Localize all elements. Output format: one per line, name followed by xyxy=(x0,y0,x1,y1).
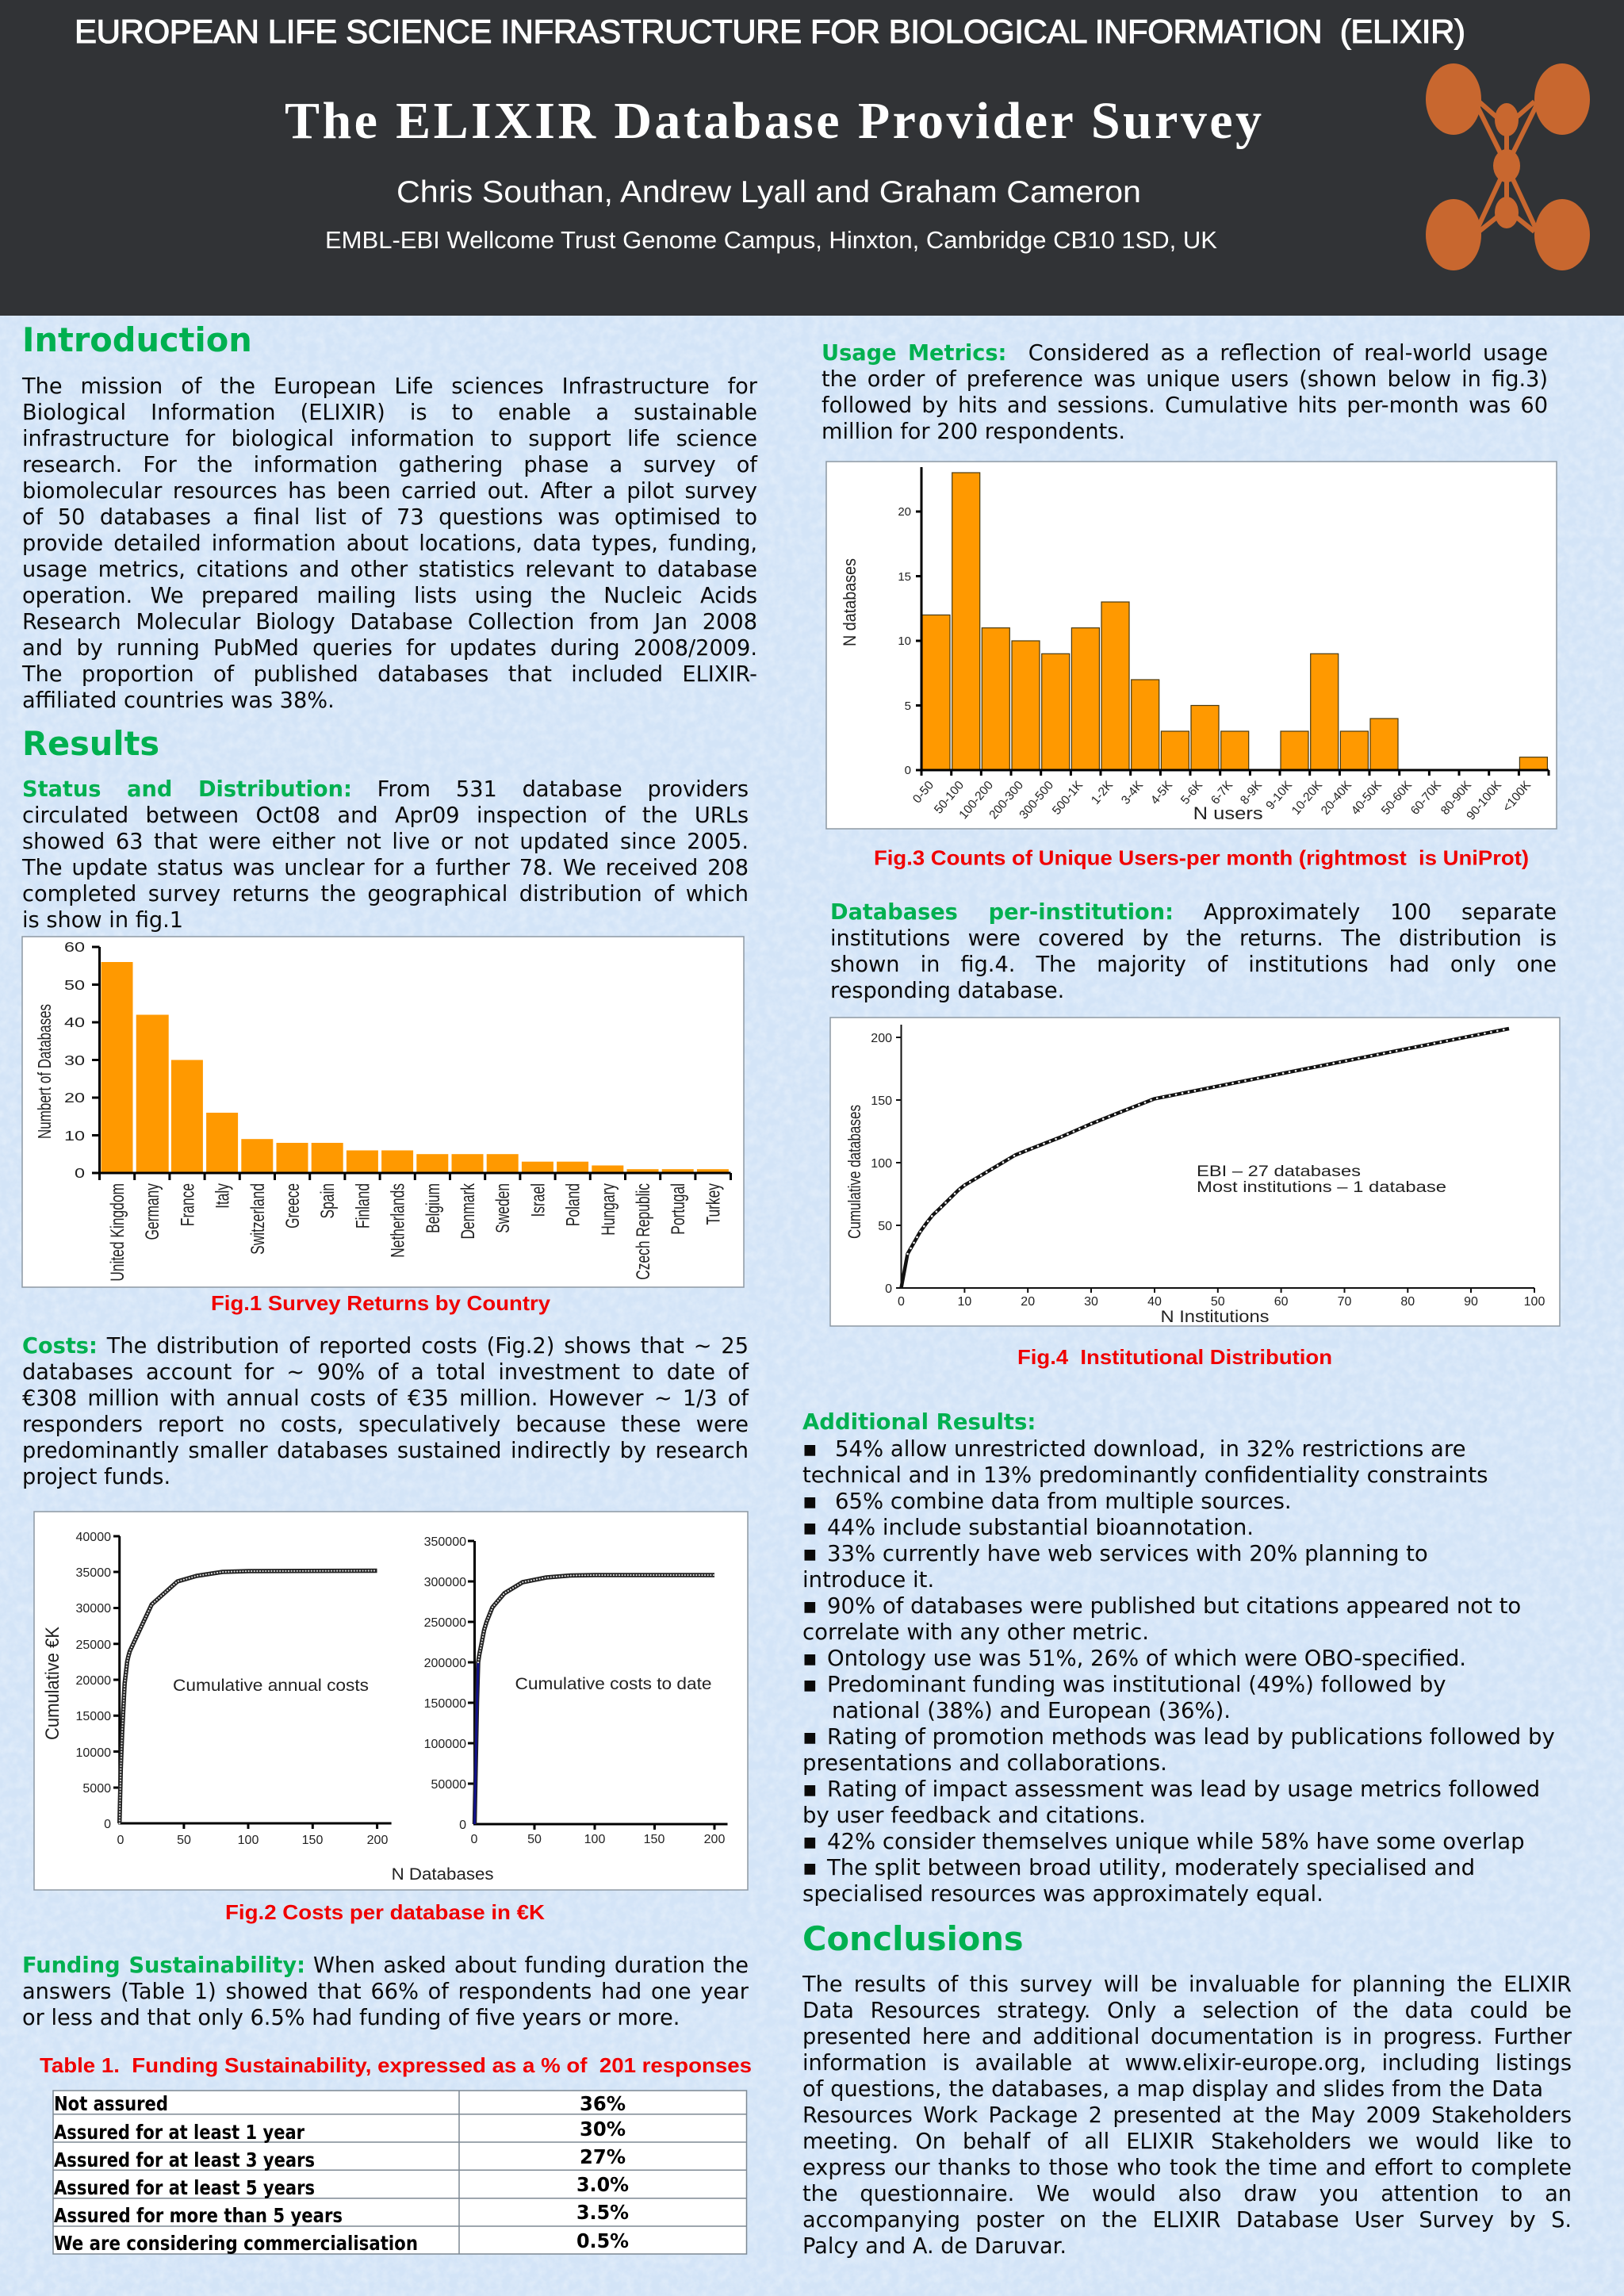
text block: additional results list: national (38%) and European (36%). xyxy=(832,1697,1231,1723)
line chart: institutional distribution: 30 xyxy=(1084,1295,1098,1309)
text block: conclusions: the questionnaire. We would also draw you attention to an xyxy=(802,2182,1572,2206)
line charts: costs per database: 5000 xyxy=(82,1782,111,1796)
text block: additional results list: ▪ xyxy=(802,1540,818,1566)
text block: additional results list: Ontology use was 51%, 26% of which were OBO-specified. xyxy=(827,1645,1466,1670)
line chart: institutional distribution xyxy=(830,1018,1560,1326)
text block: status and distribution xyxy=(22,777,749,933)
text block: conclusions xyxy=(802,1972,1572,2259)
line charts: costs per database: Cumulative annual costs xyxy=(173,1677,369,1695)
line charts: costs per database: 100 xyxy=(238,1834,259,1847)
line charts: costs per database: 350000 xyxy=(424,1535,466,1549)
table: funding sustainability: Assured for at least 5 years xyxy=(54,2176,315,2199)
bar chart: survey returns by country: Italy xyxy=(213,1183,233,1209)
bar chart: unique users per month: 90-100K xyxy=(1464,778,1504,822)
bar chart: survey returns by country: United Kingdom xyxy=(107,1183,128,1282)
bar chart: survey returns by country: Sweden xyxy=(492,1183,514,1233)
bar chart: survey returns by country: Finland xyxy=(353,1183,373,1228)
affiliation: EMBL-EBI Wellcome Trust Genome Campus, Hinxton, Cambridge CB10 1SD, UK xyxy=(325,226,1217,254)
text block: costs xyxy=(22,1334,749,1489)
bar chart: survey returns by country: 0 xyxy=(75,1165,85,1181)
bar chart: unique users per month: 20 xyxy=(898,505,911,519)
text block: additional results list: Rating of promotion methods was lead by publications followed by xyxy=(827,1724,1555,1750)
bar chart: unique users per month: 100-200 xyxy=(956,778,996,822)
text block: additional results list: 44% include substantial bioannotation. xyxy=(827,1515,1254,1540)
bar chart: unique users per month: 20-40K xyxy=(1319,778,1354,818)
text block: conclusions: accompanying poster on the ELIXIR Database User Survey by S. xyxy=(802,2208,1572,2233)
text block: conclusions: Palcy and A. de Daruvar. xyxy=(802,2234,1067,2259)
text block: costs: predominantly smaller databases sustained indirectly by research xyxy=(22,1439,749,1463)
line chart: institutional distribution: 0 xyxy=(885,1282,892,1296)
text block: introduction: of 50 databases a final list of 73 questions was optimised to xyxy=(22,505,757,530)
text block: status and distribution: completed survey returns the geographical distribution of which xyxy=(22,882,749,907)
text block: introduction: biomolecular resources has been carried out. After a pilot survey xyxy=(22,479,757,504)
line charts: costs per database: 150 xyxy=(644,1833,665,1846)
caption: Fig.2: Fig.2 Costs per database in €K xyxy=(225,1900,545,1924)
text block: usage metrics xyxy=(822,341,1548,444)
header banner xyxy=(0,0,1624,316)
table: funding sustainability: 27% xyxy=(580,2145,626,2168)
bar chart: survey returns by country: Czech Republic xyxy=(633,1183,654,1280)
line chart: institutional distribution: 10 xyxy=(958,1295,971,1309)
bar chart: unique users per month: 6-7K xyxy=(1208,778,1235,807)
line charts: costs per database: 20000 xyxy=(76,1674,111,1688)
bar chart: unique users per month: N databases xyxy=(840,558,860,646)
line chart: institutional distribution: 20 xyxy=(1021,1295,1035,1309)
line chart: institutional distribution: N Institutions xyxy=(1161,1308,1269,1326)
bar chart: survey returns by country: Spain xyxy=(317,1183,339,1218)
bar chart: unique users per month: 60-70K xyxy=(1408,778,1444,818)
bar chart: unique users per month: 50-100 xyxy=(932,778,967,817)
text block: additional results list: 42% consider themselves unique while 58% have some overlap xyxy=(827,1829,1525,1854)
line charts: costs per database: Cumulative costs to date xyxy=(515,1675,712,1693)
text block: costs: Costs: The distribution of reported costs (Fig.2) shows that ~ 25 xyxy=(22,1334,749,1359)
text block: usage metrics: the order of preference was unique users (shown below in fig.3) xyxy=(822,367,1548,392)
text block: additional results list: ▪ xyxy=(802,1435,818,1461)
bar chart: survey returns by country: Poland xyxy=(563,1183,584,1226)
line charts: costs per database: 150 xyxy=(302,1834,323,1847)
text block: additional results list: ▪ xyxy=(802,1593,818,1618)
text block: conclusions: meeting. On behalf of all ELIXIR Stakeholders we would like to xyxy=(802,2129,1572,2154)
bar chart: unique users per month: 50-60K xyxy=(1379,778,1415,818)
text block: funding sustainability: or less and that only 6.5% had funding of five years or more. xyxy=(22,2006,680,2030)
text block: introduction: infrastructure for biological information to support life science xyxy=(22,427,757,451)
line chart: institutional distribution: 50 xyxy=(1211,1295,1225,1309)
text block: status and distribution: The update status was unclear for a further 78. We received 208 xyxy=(22,856,749,880)
caption: Fig.1: Fig.1 Survey Returns by Country xyxy=(211,1291,551,1315)
text block: costs: €308 million with annual costs of €35 million. However ~ 1/3 of xyxy=(22,1386,749,1411)
table: funding sustainability: 3.0% xyxy=(576,2173,629,2196)
text block: introduction: usage metrics, citations and other statistics relevant to database xyxy=(22,558,757,582)
text block: additional results list: correlate with any other metric. xyxy=(802,1619,1149,1645)
bar chart: unique users per month: <100K xyxy=(1500,778,1534,815)
line charts: costs per database: 200 xyxy=(704,1833,725,1846)
line charts: costs per database: 30000 xyxy=(76,1602,111,1616)
text block: status and distribution: showed 63 that were either not live or not updated since 2005. xyxy=(22,830,749,854)
text block: databases per-institution xyxy=(830,900,1557,1003)
text block: introduction: affiliated countries was 38%. xyxy=(22,688,335,713)
line charts: costs per database: N Databases xyxy=(392,1865,494,1884)
bar chart: survey returns by country: 50 xyxy=(64,977,85,993)
text block: additional results list: ▪ xyxy=(802,1645,818,1670)
text block: usage metrics: million for 200 respondents. xyxy=(822,420,1125,444)
text block: additional results list: by user feedback and citations. xyxy=(802,1802,1146,1827)
text block: additional results list: technical and in 13% predominantly confidentiality constraints xyxy=(802,1462,1488,1488)
text block: additional results list: 65% combine data from multiple sources. xyxy=(835,1488,1292,1513)
text block: additional results list: introduce it. xyxy=(802,1567,934,1593)
text block: databases per-institution: shown in fig.4. The majority of institutions had only one xyxy=(830,953,1557,977)
text block: conclusions: of questions, the databases, a map display and slides from the Data xyxy=(802,2077,1543,2102)
text block: introduction: The proportion of published databases that included ELIXIR- xyxy=(22,662,757,687)
bar chart: survey returns by country: Denmark xyxy=(458,1183,479,1240)
table: funding sustainability: Assured for more than 5 years xyxy=(54,2204,343,2227)
line chart: institutional distribution: 80 xyxy=(1400,1295,1415,1309)
bar chart: survey returns by country: Netherlands xyxy=(388,1183,408,1258)
text block: databases per-institution: responding database. xyxy=(830,979,1064,1003)
line charts: costs per database: 50 xyxy=(177,1834,191,1847)
bar chart: survey returns by country: France xyxy=(178,1183,198,1226)
table: funding sustainability: 0.5% xyxy=(576,2229,629,2252)
line chart: institutional distribution: 0 xyxy=(898,1295,905,1309)
text block: conclusions: The results of this survey will be invaluable for planning the ELIXIR xyxy=(802,1972,1572,1997)
line chart: institutional distribution: 70 xyxy=(1338,1295,1351,1309)
text block: usage metrics: followed by hits and sessions. Cumulative hits per-month was 60 xyxy=(822,393,1548,418)
text block: introduction: and by running PubMed queries for updates during 2008/2009. xyxy=(22,636,757,661)
text block: introduction: The mission of the European Life sciences Infrastructure for xyxy=(22,374,757,399)
line charts: costs per database: 0 xyxy=(117,1834,124,1847)
caption: Fig.3: Fig.3 Counts of Unique Users-per month (rightmost is UniProt) xyxy=(874,846,1529,870)
table: funding sustainability: Not assured xyxy=(54,2092,168,2115)
bar chart: survey returns by country: 40 xyxy=(64,1014,85,1030)
line charts: costs per database: 100000 xyxy=(424,1738,466,1751)
bar chart: unique users per month: 80-90K xyxy=(1438,778,1474,818)
line chart: institutional distribution: Most institutions – 1 database xyxy=(1197,1179,1446,1196)
text block: status and distribution: circulated between Oct08 and Apr09 inspection of the URLs xyxy=(22,803,749,828)
bar chart: survey returns by country: 60 xyxy=(64,939,85,955)
text block: costs: databases account for ~ 90% of a total investment to date of xyxy=(22,1360,749,1385)
text block: additional results list: specialised resources was approximately equal. xyxy=(802,1881,1323,1907)
text block: status and distribution: Status and Distribution: From 531 database providers xyxy=(22,777,749,802)
bar chart: unique users per month: 3-4K xyxy=(1119,778,1146,807)
text block: introduction: research. For the information gathering phase a survey of xyxy=(22,453,757,477)
line charts: costs per database: 10000 xyxy=(76,1746,111,1760)
line charts: costs per database: Cumulative €K xyxy=(42,1627,63,1740)
bar chart: unique users per month: 15 xyxy=(898,570,911,584)
bar chart: unique users per month: 0-50 xyxy=(910,778,936,806)
bar chart: unique users per month: 1-2K xyxy=(1089,778,1116,807)
text block: additional results list: ▪ xyxy=(802,1777,818,1802)
bar chart: survey returns by country: Numbert of Databases xyxy=(36,1004,56,1139)
text block: additional results list: ▪ xyxy=(802,1854,818,1880)
text block: additional results list: 54% allow unrestricted download, in 32% restrictions are xyxy=(835,1435,1465,1461)
icon: ELIXIR logo xyxy=(1426,63,1590,270)
poster title: The ELIXIR Database Provider Survey xyxy=(285,92,1262,150)
line charts: costs per database xyxy=(34,1512,748,1890)
text block: funding sustainability: answers (Table 1) showed that 66% of respondents had one year xyxy=(22,1980,749,2004)
text block: additional results list: ▪ xyxy=(802,1488,818,1513)
text block: conclusions: Data Resources strategy. Only a selection of the data could be xyxy=(802,1999,1572,2023)
text block: additional results list: 90% of databases were published but citations appeared not to xyxy=(827,1593,1521,1618)
bar chart: unique users per month: 300-500 xyxy=(1017,778,1056,822)
line charts: costs per database: 100 xyxy=(584,1833,605,1846)
text block: funding sustainability xyxy=(22,1953,749,2030)
table: funding sustainability: 3.5% xyxy=(576,2201,629,2224)
bar chart: unique users per month: 200-300 xyxy=(986,778,1026,822)
heading: Introduction: Introduction xyxy=(22,320,252,359)
bar chart: unique users per month: 5 xyxy=(905,700,911,713)
line charts: costs per database: 50000 xyxy=(431,1778,466,1792)
text block: additional results list: ▪ xyxy=(802,1724,818,1750)
bar chart: unique users per month: N users xyxy=(1193,803,1263,823)
bar chart: unique users per month: 4-5K xyxy=(1148,778,1175,807)
heading: Conclusions: Conclusions xyxy=(802,1919,1024,1958)
heading: Results: Results xyxy=(22,724,159,763)
line chart: institutional distribution: 150 xyxy=(871,1094,892,1108)
text block: conclusions: express our thanks to those who took the time and effort to complete xyxy=(802,2156,1572,2180)
table: funding sustainability: Assured for at least 1 year xyxy=(54,2121,305,2144)
bar chart: unique users per month: 10 xyxy=(898,634,911,648)
line charts: costs per database: 35000 xyxy=(76,1566,111,1580)
line charts: costs per database: 250000 xyxy=(424,1616,466,1630)
line charts: costs per database: 0 xyxy=(471,1833,478,1846)
programme title: EUROPEAN LIFE SCIENCE INFRASTRUCTURE FOR BIOLOGICAL INFORMATION (ELIXIR) xyxy=(75,13,1465,50)
bar chart: unique users per month: 40-50K xyxy=(1349,778,1385,818)
text block: additional results list: presentations and collaborations. xyxy=(802,1750,1167,1775)
table: funding sustainability: Assured for at least 3 years xyxy=(54,2148,315,2171)
heading: Additional Results: Additional Results: xyxy=(802,1409,1036,1435)
bar chart: survey returns by country: Switzerland xyxy=(247,1183,269,1255)
bar chart: survey returns by country: Turkey xyxy=(703,1183,724,1225)
text block: introduction xyxy=(22,374,758,713)
line chart: institutional distribution: EBI – 27 databases xyxy=(1197,1163,1361,1180)
bar chart: survey returns by country: 20 xyxy=(64,1090,85,1106)
line chart: institutional distribution: 60 xyxy=(1274,1295,1289,1309)
bar chart: survey returns by country: Hungary xyxy=(598,1183,619,1236)
line charts: costs per database: 0 xyxy=(104,1818,111,1831)
text block: usage metrics: Usage Metrics: Considered as a reflection of real-world usage xyxy=(822,341,1548,366)
line charts: costs per database: 200000 xyxy=(424,1657,466,1670)
bar chart: unique users per month: 5-6K xyxy=(1178,778,1205,807)
line charts: costs per database: 0 xyxy=(459,1819,466,1832)
bar chart: survey returns by country: 30 xyxy=(64,1052,85,1068)
bar chart: survey returns by country: Portugal xyxy=(668,1183,689,1235)
bar chart: unique users per month: 8-9K xyxy=(1238,778,1265,807)
bar chart: unique users per month: 10-20K xyxy=(1289,778,1325,818)
line chart: institutional distribution: 40 xyxy=(1147,1295,1162,1309)
text block: additional results list: Rating of impact assessment was lead by usage metrics followed xyxy=(827,1777,1540,1802)
text block: status and distribution: is show in fig.1 xyxy=(22,908,183,933)
line charts: costs per database: 150000 xyxy=(424,1697,466,1711)
line chart: institutional distribution: Cumulative databases xyxy=(845,1105,864,1239)
bar chart: unique users per month: 0 xyxy=(905,764,911,777)
caption: Table 1: Table 1. Funding Sustainability, expressed as a % of 201 responses xyxy=(40,2053,752,2077)
authors: Chris Southan, Andrew Lyall and Graham Cameron xyxy=(396,175,1141,209)
line charts: costs per database: 300000 xyxy=(424,1576,466,1589)
text block: introduction: operation. We prepared mailing lists using the Nucleic Acids xyxy=(22,584,757,608)
bar chart: survey returns by country: 10 xyxy=(64,1128,85,1144)
bar chart: unique users per month: 500-1K xyxy=(1050,778,1086,818)
text block: introduction: Biological Information (ELIXIR) is to enable a sustainable xyxy=(22,401,757,425)
bar chart: unique users per month xyxy=(826,462,1557,829)
line chart: institutional distribution: 90 xyxy=(1464,1295,1478,1309)
text block: databases per-institution: institutions were covered by the returns. The distribution is xyxy=(830,926,1557,951)
text block: additional results list: Predominant funding was institutional (49%) followed by xyxy=(827,1672,1446,1697)
text block: additional results list: ▪ xyxy=(802,1672,818,1697)
caption: Fig.4: Fig.4 Institutional Distribution xyxy=(1017,1345,1332,1369)
line charts: costs per database: 50 xyxy=(527,1833,542,1846)
line chart: institutional distribution: 50 xyxy=(878,1220,892,1233)
bar chart: unique users per month: 9-10K xyxy=(1263,778,1295,812)
bar chart: survey returns by country: Belgium xyxy=(423,1183,444,1233)
text block: conclusions: Resources Work Package 2 presented at the May 2009 Stakeholders xyxy=(802,2103,1572,2128)
line charts: costs per database: 25000 xyxy=(76,1639,111,1652)
line chart: institutional distribution: 100 xyxy=(1524,1295,1545,1309)
text block: introduction: provide detailed information about locations, data types, funding, xyxy=(22,531,757,556)
text block: introduction: Research Molecular Biology Database Collection from Jan 2008 xyxy=(22,610,757,634)
bar chart: survey returns by country xyxy=(22,937,744,1287)
line chart: institutional distribution: 100 xyxy=(871,1157,892,1171)
text block: costs: project funds. xyxy=(22,1465,170,1489)
table: funding sustainability: 30% xyxy=(580,2118,626,2141)
bar chart: survey returns by country: Greece xyxy=(282,1183,304,1228)
text block: additional results list: 33% currently have web services with 20% planning to xyxy=(827,1540,1428,1566)
text block: conclusions: presented here and additional documentation is in progress. Further xyxy=(802,2025,1572,2049)
table: funding sustainability xyxy=(53,2091,747,2255)
text block: databases per-institution: Databases per-institution: Approximately 100 separate xyxy=(830,900,1557,925)
line charts: costs per database: 15000 xyxy=(76,1710,111,1723)
table: funding sustainability: 36% xyxy=(580,2092,626,2115)
text block: additional results list xyxy=(802,1435,1555,1907)
bar chart: survey returns by country: Israel xyxy=(528,1183,549,1217)
bar chart: survey returns by country: Germany xyxy=(142,1183,163,1240)
table: funding sustainability: We are considering commercialisation xyxy=(54,2232,418,2255)
text block: costs: responders report no costs, speculatively because these were xyxy=(22,1412,749,1437)
line charts: costs per database: 40000 xyxy=(76,1531,111,1544)
text block: additional results list: ▪ xyxy=(802,1829,818,1854)
line chart: institutional distribution: 200 xyxy=(871,1032,892,1045)
text block: additional results list: The split between broad utility, moderately specialised and xyxy=(827,1854,1475,1880)
text block: additional results list: ▪ xyxy=(802,1515,818,1540)
line charts: costs per database: 200 xyxy=(367,1834,388,1847)
text block: funding sustainability: Funding Sustainability: When asked about funding duration the xyxy=(22,1953,749,1978)
text block: conclusions: information is available at www.elixir-europe.org, including listings xyxy=(802,2051,1572,2076)
